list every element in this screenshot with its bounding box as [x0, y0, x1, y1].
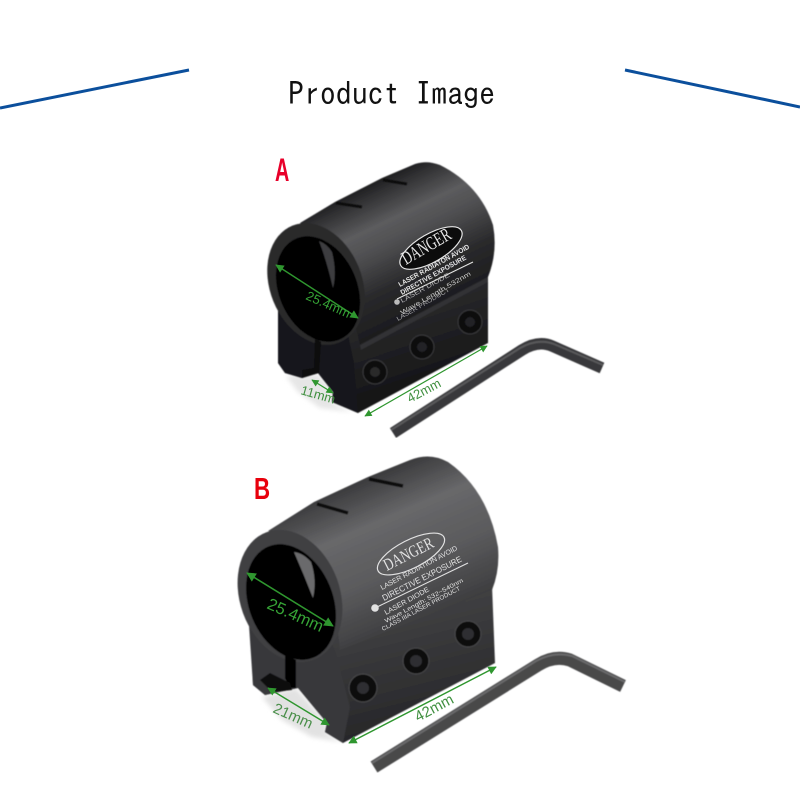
mount B danger markings: DANGER	[381, 534, 438, 575]
mount A cylinder	[300, 162, 495, 345]
mount A danger markings: DANGER	[398, 224, 455, 269]
mount B lower body	[250, 585, 495, 743]
mount B screws	[349, 621, 481, 702]
mount A dimension 11mm: 11mm	[299, 382, 337, 407]
mount A dimension 42mm: 42mm	[404, 375, 443, 406]
mount B ring	[220, 515, 360, 677]
mount B inner reflection	[294, 552, 315, 598]
mount A danger markings: LASER PRODUCT	[396, 287, 451, 323]
right decorative title line	[625, 70, 800, 107]
shadow under mount B	[262, 688, 342, 742]
mount A ring	[250, 208, 382, 360]
mount B danger markings: LASER DIODE	[384, 586, 431, 617]
mount A danger markings: LASER RADIATON AVOID	[398, 244, 471, 289]
mount B danger markings: LASER RADIATION AVOID	[380, 545, 459, 592]
left decorative title line	[0, 70, 189, 108]
mount A danger markings: LASER DIODE	[400, 272, 452, 305]
title: Product Image	[288, 77, 495, 109]
mount A dimension 42mm	[365, 346, 487, 416]
mount A bore	[260, 223, 376, 355]
mount B rail notch	[260, 673, 292, 692]
label B: B	[254, 471, 270, 506]
mount B danger markings: DIRECTIVE EXPOSURE	[380, 554, 464, 603]
mount B danger markings	[371, 525, 468, 633]
mount A front face	[278, 290, 358, 413]
mount A rail slot	[302, 338, 321, 378]
product A: laser mount	[250, 162, 495, 416]
mount B dimension 25.4mm	[247, 573, 333, 636]
mount B dimension 42mm	[349, 667, 496, 743]
mount A body ledge	[360, 277, 488, 350]
product B: laser mount	[220, 456, 498, 743]
mount B dimension 21mm: 21mm	[270, 700, 315, 733]
mount B dimension 25.4mm: 25.4mm	[264, 595, 326, 636]
mount B rail slot	[285, 655, 296, 688]
mount A danger markings: Wave Length 532nm	[400, 271, 472, 317]
mount B slots	[317, 479, 403, 513]
mount A dimension 25.4mm: 25.4mm	[304, 288, 353, 321]
mount A lower body	[278, 275, 488, 413]
shadow under mount A	[286, 374, 352, 412]
mount A danger markings: DIRECTIVE EXPOSURE	[400, 255, 468, 297]
mount A inner slit	[319, 241, 335, 288]
mount A dimension 25.4mm	[276, 265, 358, 321]
mount A danger markings	[394, 218, 473, 323]
hex key B	[372, 654, 625, 767]
mount B dimension 42mm: 42mm	[412, 691, 457, 726]
mount B danger markings: Wave Length: 532~540nm	[384, 578, 465, 625]
mount A screws	[363, 310, 482, 384]
mount B danger markings: CLASS IIIA LASER PRODUCT	[381, 586, 462, 633]
mount B cylinder	[268, 456, 498, 650]
mount B dimension 21mm	[268, 688, 329, 733]
mount A slots	[336, 180, 407, 207]
hex key A	[391, 342, 603, 433]
mount B bore	[230, 531, 352, 673]
mount B front face	[248, 610, 350, 743]
label A: A	[275, 152, 289, 188]
